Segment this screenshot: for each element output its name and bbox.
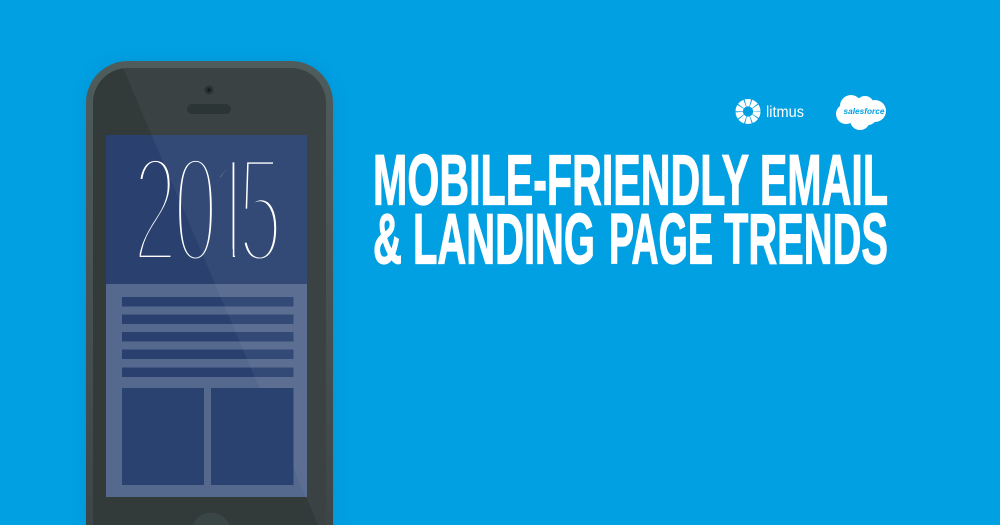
salesforce wordmark: salesforce (844, 106, 885, 116)
cover for base of digit 1 (211, 249, 243, 260)
screen glare (152, 135, 307, 497)
phone shadow (83, 59, 336, 525)
screen (106, 124, 307, 497)
phone body (86, 61, 333, 525)
litmus logo (739, 103, 804, 121)
speaker (187, 104, 231, 114)
phone (83, 59, 336, 525)
image block left (122, 388, 204, 485)
screen header (106, 135, 307, 284)
text lines (122, 297, 294, 377)
title (373, 142, 888, 280)
title line 2: PAGE (609, 200, 713, 280)
litmus wordmark: litmus (766, 104, 804, 121)
screen body (106, 284, 307, 497)
image block right (211, 388, 294, 485)
salesforce cloud (836, 95, 886, 130)
title line 2: & LANDING (373, 200, 595, 280)
litmus icon (739, 103, 757, 120)
infographic cover (86, 61, 888, 525)
phone bezel (93, 68, 326, 525)
camera (204, 86, 214, 94)
year label: 2015 (133, 124, 282, 295)
salesforce logo (836, 95, 886, 130)
home button (192, 513, 230, 525)
